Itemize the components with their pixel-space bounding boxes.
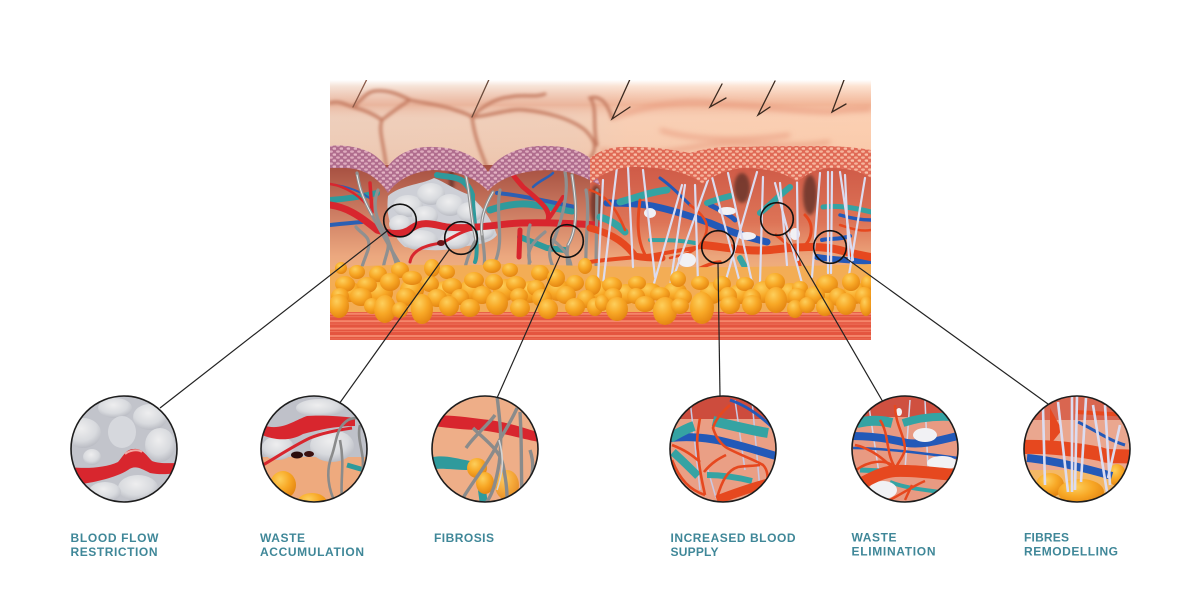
- connector lines: [160, 231, 1048, 408]
- label: waste elimination: [852, 530, 936, 558]
- label: waste accumulation: WASTE: [260, 531, 305, 545]
- label: fibres remodelling: REMODELLING: [1024, 544, 1118, 558]
- grey fibrotic mass: [387, 178, 497, 250]
- grey collagen fibres: [354, 171, 599, 266]
- blue vessels right: [607, 178, 871, 262]
- label: blood flow restriction: RESTRICTION: [70, 545, 158, 559]
- magnifier circles on skin: [384, 203, 846, 263]
- skin cross-section illustration: [329, 72, 875, 340]
- infographic: [70, 80, 1131, 556]
- epidermis layer left: [330, 146, 600, 193]
- dermis layer right: [590, 166, 871, 268]
- label: increased blood supply: SUPPLY: [670, 545, 718, 559]
- detail circle: waste elimination: [850, 395, 960, 505]
- label: blood flow restriction: [70, 531, 159, 559]
- label: waste accumulation: ACCUMULATION: [260, 545, 364, 559]
- label: fibres remodelling: [1024, 530, 1118, 558]
- detail circle: waste accumulation: [260, 395, 368, 513]
- fat background: [330, 264, 871, 312]
- dark waste deposit: [437, 240, 445, 246]
- fat cells: [329, 258, 875, 325]
- teal vessels right: [596, 184, 871, 267]
- blue vessels left: [330, 173, 575, 225]
- label: increased blood supply: [670, 531, 796, 559]
- detail circle: increased blood supply: [668, 395, 778, 505]
- label: blood flow restriction: BLOOD FLOW: [70, 531, 159, 545]
- label: increased blood supply: INCREASED BLOOD: [670, 531, 796, 545]
- label: waste accumulation: [260, 531, 364, 559]
- detail circle: fibres remodelling: [1020, 395, 1135, 505]
- detail circle: blood flow restriction: [65, 395, 180, 503]
- muscle layer: [330, 312, 871, 340]
- red arteries left: [330, 173, 597, 262]
- label: fibres remodelling: FIBRES: [1024, 530, 1069, 544]
- label: waste elimination: ELIMINATION: [852, 544, 936, 558]
- orange arteries right: [586, 188, 871, 268]
- dermis layer left: [330, 165, 590, 270]
- teal vessels left: [330, 175, 572, 262]
- label: waste elimination: WASTE: [852, 530, 896, 544]
- surface skin layer: [330, 81, 871, 165]
- detail circle: fibrosis: [430, 395, 540, 505]
- brown patches: [449, 170, 817, 225]
- hairs: [352, 80, 847, 121]
- white waste deposits: [644, 207, 800, 267]
- label: fibrosis: FIBROSIS: [434, 531, 494, 545]
- epidermis layer right: [590, 146, 871, 184]
- white fibres right: [598, 167, 865, 293]
